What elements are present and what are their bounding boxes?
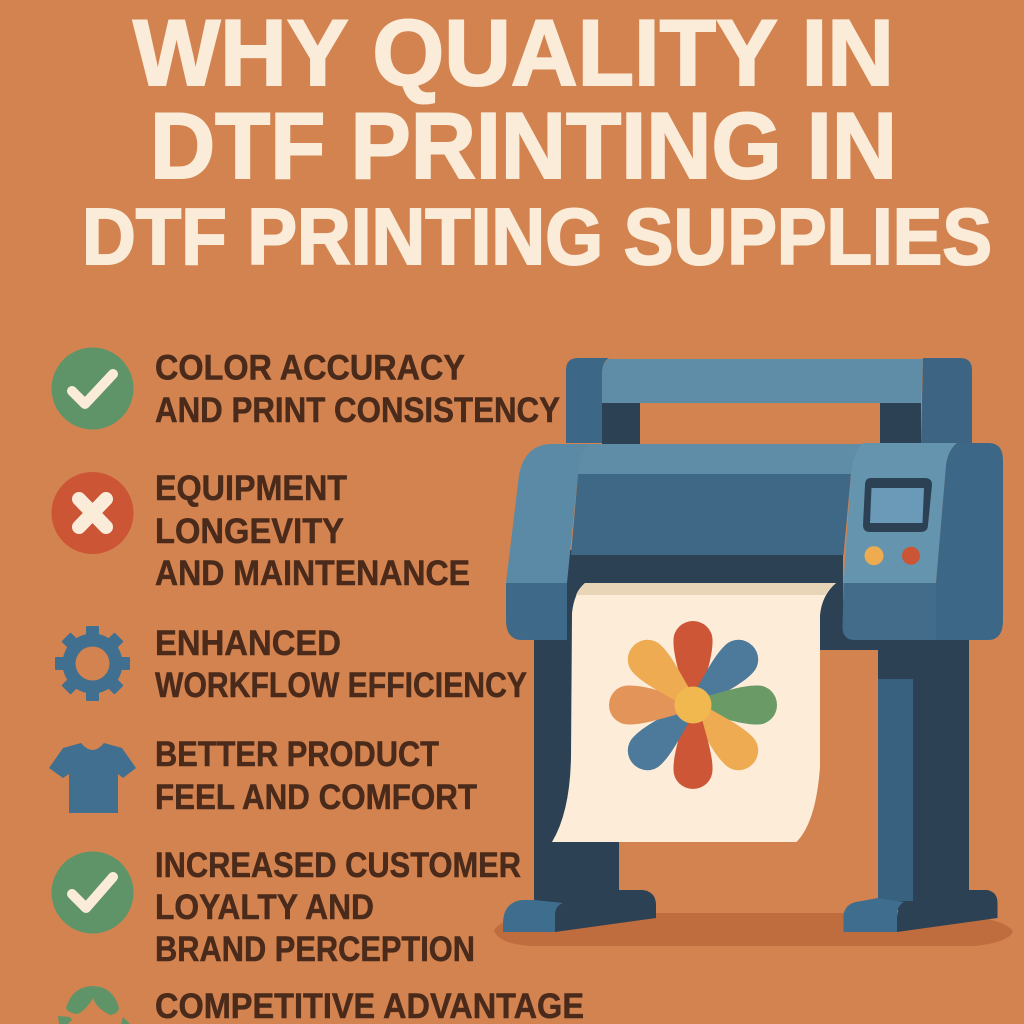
stand legs bbox=[534, 550, 969, 910]
text: workflow efficiency: ENHANCED bbox=[155, 624, 341, 663]
text: customer loyalty: INCREASED CUSTOMER bbox=[155, 846, 521, 885]
icon: t-shirt bbox=[49, 743, 136, 813]
top panel bbox=[578, 444, 863, 474]
text: equipment longevity: AND MAINTENANCE bbox=[155, 554, 470, 593]
printer illustration bbox=[494, 358, 1013, 946]
buttons bbox=[864, 546, 920, 565]
text: color accuracy bbox=[155, 348, 560, 430]
text: equipment longevity: EQUIPMENT bbox=[155, 469, 347, 508]
list item: workflow efficiency bbox=[55, 624, 527, 705]
list item: competitive advantage bbox=[58, 986, 584, 1024]
icon: recycle arrows bbox=[58, 986, 130, 1024]
title: WHY QUALITY IN bbox=[133, 0, 894, 105]
control panel bbox=[844, 443, 957, 583]
text: equipment longevity bbox=[155, 469, 470, 593]
right foot bbox=[844, 890, 998, 932]
flower design bbox=[609, 621, 777, 789]
text: customer loyalty: BRAND PERCEPTION bbox=[155, 930, 475, 969]
list item: product feel bbox=[49, 735, 477, 817]
title: DTF PRINTING IN bbox=[150, 93, 897, 198]
left wing bbox=[506, 444, 589, 583]
text: product feel: BETTER PRODUCT bbox=[155, 735, 439, 774]
text: customer loyalty: LOYALTY AND bbox=[155, 888, 374, 927]
top bar posts bbox=[566, 358, 972, 444]
icon: green check bbox=[52, 852, 134, 934]
icon: red cross bbox=[52, 472, 134, 554]
title bbox=[82, 0, 992, 281]
right wing bbox=[936, 443, 1003, 640]
icon: green check bbox=[52, 348, 134, 430]
text: workflow efficiency bbox=[155, 624, 527, 705]
text: customer loyalty bbox=[155, 846, 521, 969]
text: color accuracy: COLOR ACCURACY bbox=[155, 348, 465, 388]
list item: customer loyalty bbox=[52, 846, 521, 969]
left foot bbox=[503, 890, 656, 932]
text: product feel bbox=[155, 735, 477, 817]
floor shadow bbox=[494, 913, 1013, 946]
printed sheet bbox=[552, 583, 836, 842]
text: equipment longevity: LONGEVITY bbox=[155, 512, 344, 551]
icon: gear bbox=[55, 626, 130, 701]
text: workflow efficiency: WORKFLOW EFFICIENCY bbox=[155, 666, 527, 705]
screen bbox=[863, 478, 932, 532]
text: color accuracy: AND PRINT CONSISTENCY bbox=[155, 391, 560, 430]
text: product feel: FEEL AND COMFORT bbox=[155, 778, 477, 817]
list item: equipment longevity bbox=[52, 469, 470, 593]
list item: color accuracy bbox=[52, 348, 560, 430]
printer body bbox=[506, 443, 1003, 640]
front cover bbox=[571, 474, 851, 555]
